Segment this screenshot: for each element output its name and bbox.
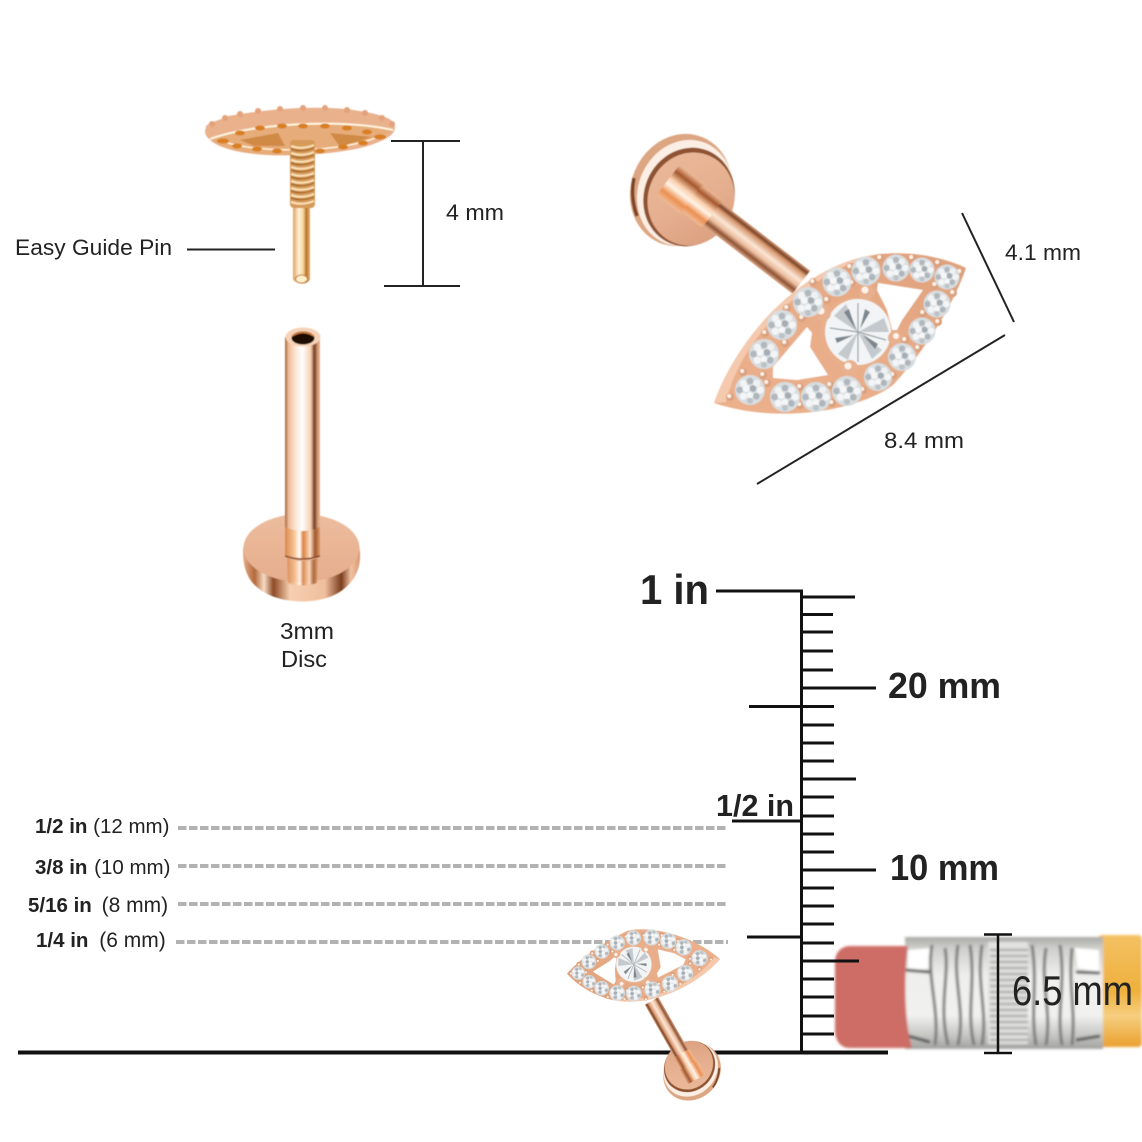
dimension: 6.5 mm pencil width [984,934,1133,1053]
dimension: 4.1 mm: 4.1 mm [1005,240,1081,265]
label: 3mm disc: 3mm [280,618,334,644]
dimension: 4 mm: 4 mm [446,200,504,225]
size reference dashed guide lines [176,828,728,942]
center stone setting [815,284,902,376]
size labels: 1/2 in (12 mm) [35,815,169,838]
ruler [716,591,876,1052]
dimension: 4.1 mm [962,213,1081,322]
threaded screw [290,140,315,208]
size labels: 5/16 in (8 mm) [28,894,168,917]
disc base [243,514,360,602]
label: easy guide pin: Easy Guide Pin [15,235,172,260]
post shaft [656,165,813,297]
guide pin [293,208,310,284]
pencil eraser scale reference [835,935,1142,1049]
ruler labels: 20 mm [888,665,1001,706]
size labels: 3/8 in (10 mm) [35,856,170,879]
actual-size evil eye piece on the scale [536,901,772,1121]
threaded post with 3mm disc [243,328,360,602]
metal ferrule [905,937,1103,1049]
eye openings [773,283,923,380]
screw-on evil eye top, 3/4 view [613,118,966,414]
marquise eye frame [714,253,966,414]
label: 3mm disc: Disc [281,646,327,672]
ruler labels: 1/2 in [716,788,794,823]
yellow pencil barrel [1098,935,1142,1047]
disc back [613,118,749,262]
jewel top underside [205,105,395,155]
dimension: 8.4 mm: 8.4 mm [884,428,964,453]
ruler ticks [801,597,876,1034]
ruler spine and inch marks [716,591,802,1052]
hollow tube [285,328,320,586]
size labels [28,815,170,952]
frame rim highlight [714,254,880,403]
pave stones [735,254,960,412]
ruler labels [640,566,1001,888]
eraser [835,946,912,1048]
ruler labels: 1 in [640,566,709,613]
dimension: 4 mm [384,141,504,286]
baseline [18,1050,888,1054]
screw-on top with easy guide pin, side view [205,105,395,284]
dimension: 8.4 mm [757,335,1005,484]
label: 3mm disc [280,618,334,672]
size labels: 1/4 in (6 mm) [36,929,166,952]
ruler labels: 10 mm [890,847,999,888]
setting beads [726,254,964,409]
